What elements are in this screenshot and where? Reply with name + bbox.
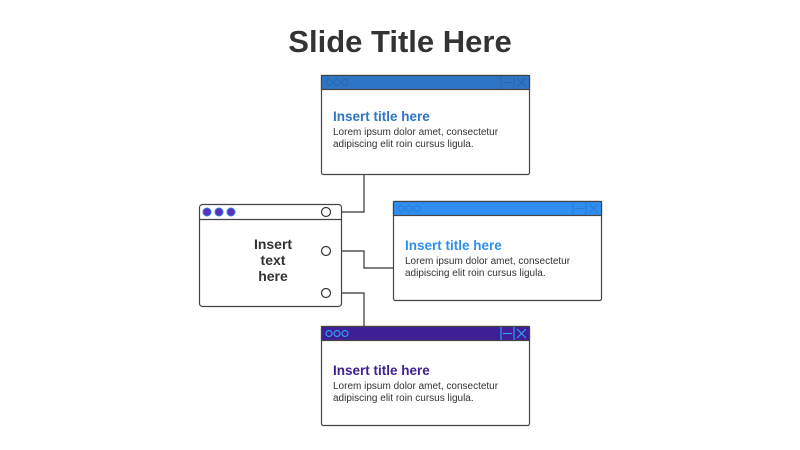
panel: top card: Insert title here — [333, 109, 430, 124]
panel: middle card: Lorem ipsum dolor amet, consectetur — [405, 256, 571, 267]
connectors — [331, 174, 393, 326]
panel: bottom card: Lorem ipsum dolor amet, consectetur — [333, 381, 499, 392]
panel: middle card: Insert title here — [405, 238, 502, 253]
panel: top card: Lorem ipsum dolor amet, consectetur — [333, 127, 499, 138]
panel: left window — [200, 204, 342, 306]
title: Slide Title Here — [288, 24, 512, 59]
panel: left window: here — [258, 268, 288, 284]
panel: top card — [322, 76, 530, 174]
panel: middle card — [394, 202, 602, 300]
panel: left window: Insert — [254, 236, 292, 252]
panel: left window: text — [261, 252, 286, 268]
panel: bottom card: Insert title here — [333, 363, 430, 378]
panel: middle card: adipiscing elit roin cursus ligula. — [405, 268, 546, 279]
panel: bottom card — [322, 326, 530, 426]
panel: bottom card: adipiscing elit roin cursus ligula. — [333, 393, 474, 404]
panel: top card: adipiscing elit roin cursus ligula. — [333, 139, 474, 150]
